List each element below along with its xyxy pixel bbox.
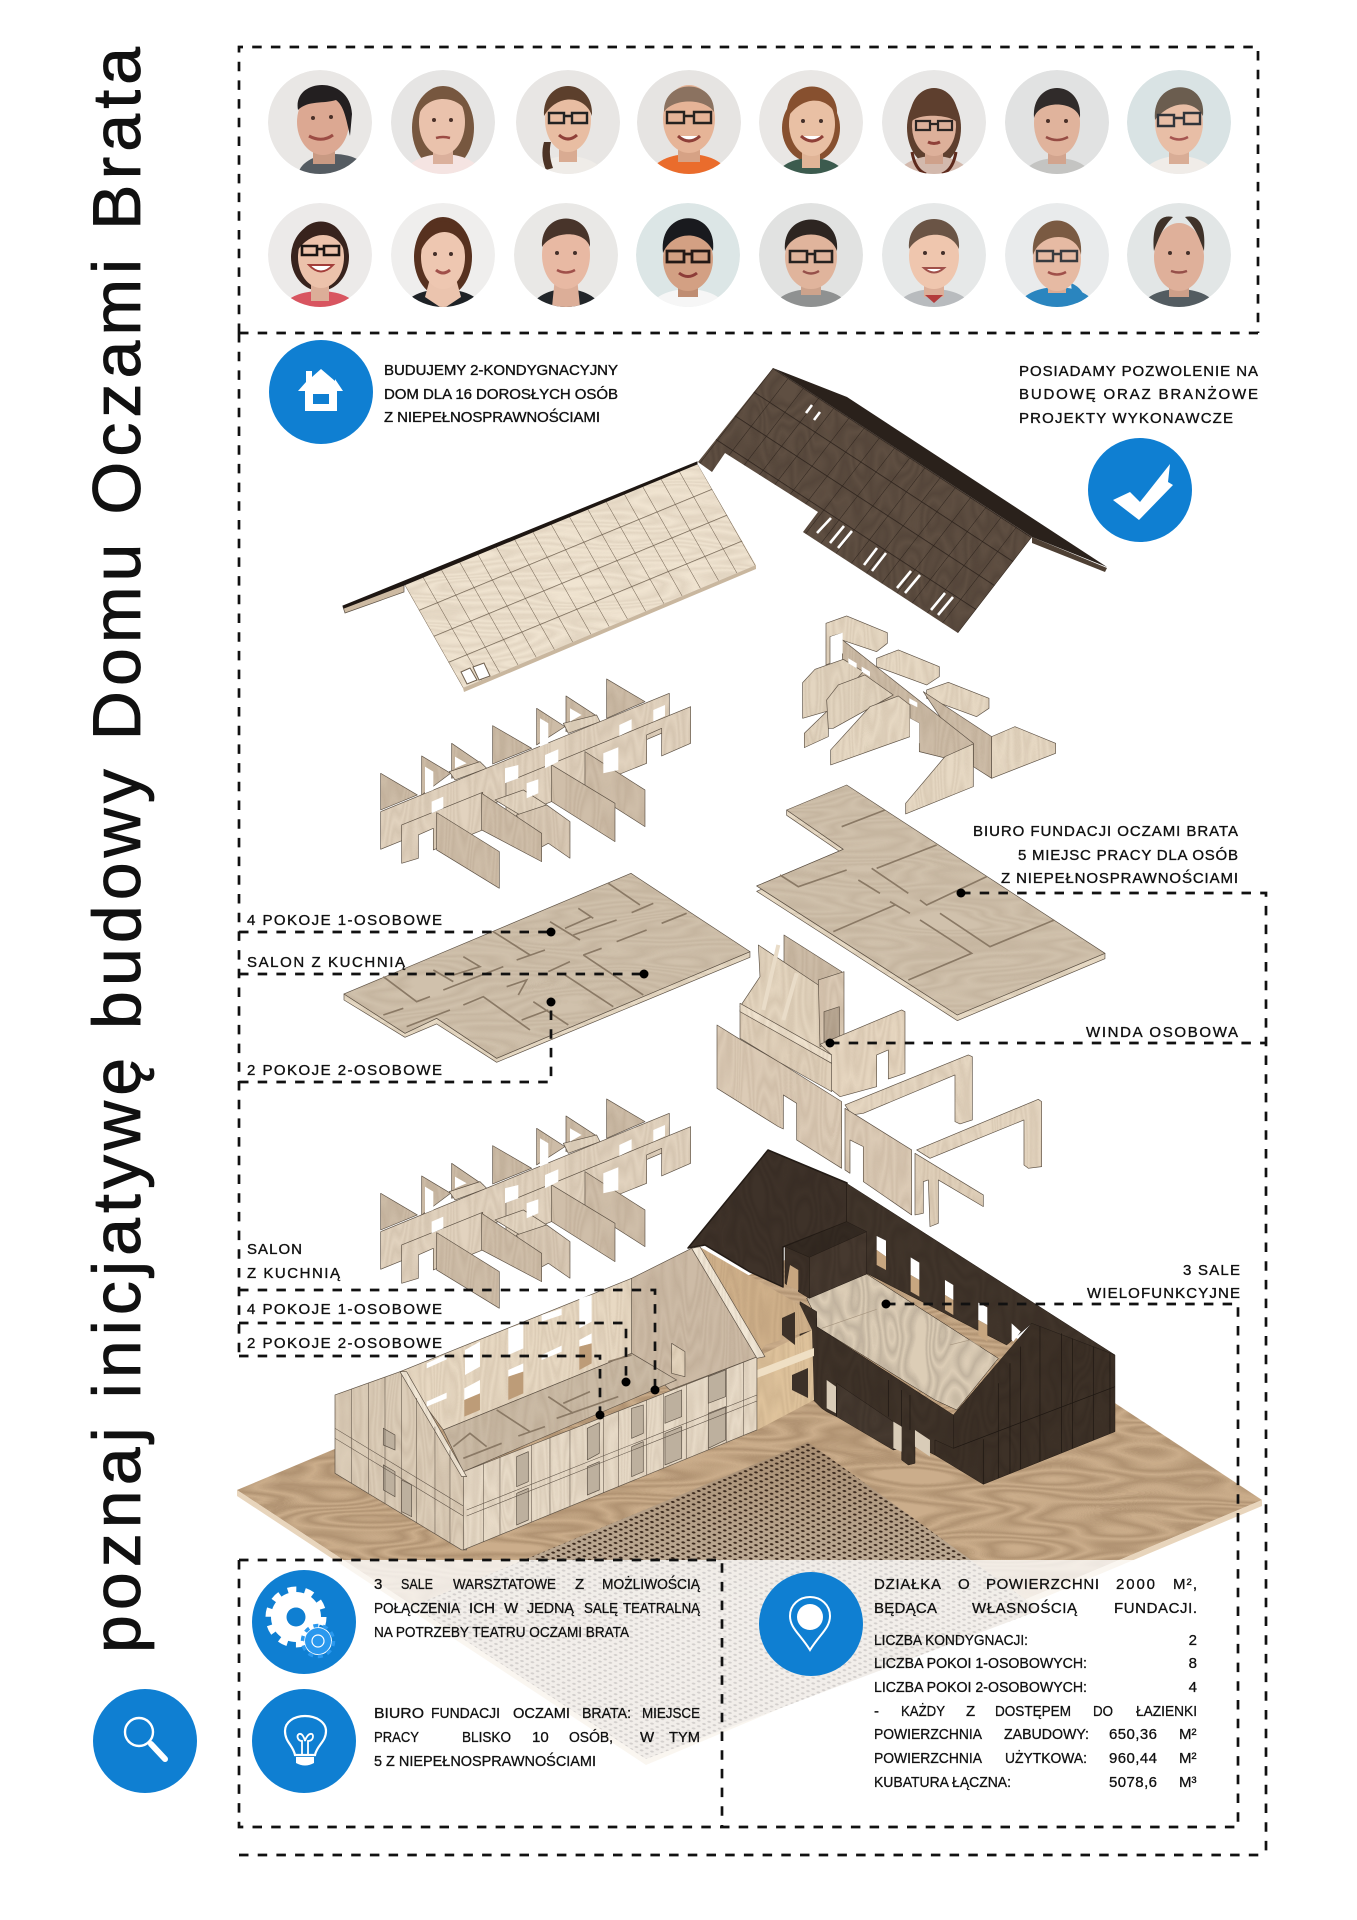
labels: ground floor rooms: 2 POKOJE 2-OSOBOWE (247, 1335, 442, 1352)
table: building data: Z (966, 1703, 975, 1720)
text: biuro fundacji miejsca pracy: 10 (532, 1729, 549, 1746)
text: biuro fundacji miejsca pracy: OSÓB, (569, 1729, 613, 1746)
labels: biuro fundacji: BIURO FUNDACJI OCZAMI BRATA (973, 823, 1238, 840)
table: building data: 4 (1189, 1679, 1197, 1696)
callout: salon z kuchnia (floor) (239, 970, 648, 978)
labels: floor rooms: SALON Z KUCHNIĄ (247, 954, 406, 971)
text: budujemy: BUDUJEMY 2-KONDYGNACYJNY (384, 362, 618, 379)
table: building data: 5078,6 (1109, 1774, 1157, 1791)
portrait 9 (268, 203, 372, 307)
table: building data: KAŻDY (901, 1702, 945, 1720)
table: building data: 2 (1189, 1632, 1197, 1649)
ground plate with courtyard (237, 1231, 1262, 1765)
portrait 15 (1005, 203, 1109, 307)
labels: biuro fundacji (973, 823, 1238, 887)
text: biuro fundacji miejsca pracy: TYM (669, 1729, 700, 1746)
text: sale warsztatowe: W (504, 1600, 519, 1617)
text: biuro fundacji miejsca pracy: 5 Z NIEPEŁNOSPRAWNOŚCIAMI (374, 1752, 596, 1770)
dark roof panel (698, 368, 1107, 633)
callout: 2 pokoje 2-osobowe (ground) (239, 1356, 604, 1420)
callout: salon z kuchnia (ground) (239, 1290, 660, 1394)
labels: biuro fundacji: Z NIEPEŁNOSPRAWNOŚCIAMI (1001, 869, 1238, 887)
portrait 1 (268, 70, 372, 174)
text: dzialka: BĘDĄCA (874, 1600, 937, 1617)
labels: ground floor rooms: SALON (247, 1241, 302, 1258)
callout: frame top and dividers (239, 47, 1258, 1356)
table: building data: M² (1179, 1726, 1196, 1743)
text: sale warsztatowe: SALĘ (584, 1600, 618, 1617)
fade overlay over lower plate (239, 1560, 1266, 1775)
upper floor plate right (757, 785, 1105, 1021)
icon: house (269, 340, 373, 444)
portrait 4 (637, 70, 741, 174)
portrait 3 (516, 70, 620, 174)
text: budujemy: Z NIEPEŁNOSPRAWNOŚCIAMI (384, 408, 600, 426)
callout: 4 pokoje 1-osobowe (floor) (239, 928, 556, 936)
table: building data: DO (1093, 1703, 1113, 1720)
text: dzialka (874, 1576, 1197, 1617)
text: sale warsztatowe: NA POTRZEBY TEATRU OCZAMI BRATA (374, 1624, 629, 1641)
labels: ground floor rooms (247, 1241, 442, 1352)
portrait 16 (1127, 203, 1231, 307)
text: sale warsztatowe (374, 1575, 701, 1641)
callout: 4 pokoje 1-osobowe (ground) (239, 1323, 630, 1386)
table: building data: 8 (1189, 1655, 1197, 1672)
lower floor partition walls (381, 1099, 691, 1308)
text: biuro fundacji miejsca pracy: PRACY (374, 1729, 419, 1746)
table: building data: ZABUDOWY: (1004, 1726, 1089, 1743)
text: sale warsztatowe: MOŻLIWOŚCIĄ (602, 1575, 701, 1593)
upper floor partition walls right (803, 616, 1056, 814)
text: biuro fundacji miejsca pracy: OCZAMI (513, 1705, 570, 1722)
text: dzialka: POWIERZCHNI (986, 1576, 1099, 1593)
text: pozwolenie: POSIADAMY POZWOLENIE NA (1019, 363, 1258, 380)
light roof panel (343, 462, 756, 692)
portrait 8 (1127, 70, 1231, 174)
text: budujemy (384, 362, 618, 426)
panel: portraits of residents (268, 70, 1231, 337)
text: pozwolenie (1019, 363, 1258, 427)
portrait 6 (882, 70, 986, 174)
table: building data: LICZBA KONDYGNACJI: (874, 1632, 1028, 1649)
portrait 7 (1005, 70, 1109, 174)
light residential building (335, 1247, 765, 1550)
icon: gears (252, 1570, 356, 1674)
text: sale warsztatowe: SALE (401, 1576, 433, 1593)
labels: 3 sale wielofunkcyjne: 3 SALE (1183, 1262, 1240, 1279)
labels: floor rooms (247, 912, 442, 1079)
text: biuro fundacji miejsca pracy: BRATA: (582, 1705, 631, 1722)
label: winda osobowa: WINDA OSOBOWA (1086, 1024, 1238, 1041)
portrait 12 (636, 203, 740, 307)
callout: 2 pokoje 2-osobowe (floor) (239, 998, 556, 1082)
table: building data: 650,36 (1109, 1726, 1157, 1743)
text: dzialka: WŁASNOŚCIĄ (972, 1599, 1078, 1617)
table: building data: M² (1179, 1750, 1196, 1767)
table: building data: - (874, 1703, 879, 1720)
labels: biuro fundacji: 5 MIEJSC PRACY DLA OSÓB (1018, 847, 1238, 864)
table: building data: POWIERZCHNIA (874, 1726, 982, 1743)
labels: floor rooms: 4 POKOJE 1-OSOBOWE (247, 912, 442, 929)
table: building data: 960,44 (1109, 1750, 1157, 1767)
text: biuro fundacji miejsca pracy: BLISKO (462, 1729, 511, 1746)
labels: ground floor rooms: Z KUCHNIĄ (247, 1265, 341, 1282)
table: building data: UŻYTKOWA: (1005, 1749, 1087, 1767)
callout lines with dots (239, 47, 1266, 1855)
portrait 13 (759, 203, 863, 307)
icon: light bulb (252, 1689, 356, 1793)
table: building data: LICZBA POKOI 2-OSOBOWYCH: (874, 1679, 1087, 1696)
text: biuro fundacji miejsca pracy: FUNDACJI (431, 1705, 500, 1722)
text: sale warsztatowe: Z (575, 1576, 584, 1593)
table: building data: ŁAZIENKI (1136, 1703, 1197, 1720)
title: poznaj inicjatywę budowy Domu Oczami Brata (79, 47, 155, 1653)
text: biuro fundacji miejsca pracy (374, 1705, 700, 1770)
portrait 11 (514, 203, 618, 307)
icon: magnifier (93, 1689, 197, 1793)
upper floor plate left (344, 873, 750, 1062)
callout: winda osobowa (826, 1038, 1266, 1048)
text: dzialka: 2000 (1116, 1576, 1155, 1593)
callout: biuro fundacji (956, 888, 1266, 1855)
table: building data: M³ (1179, 1774, 1196, 1791)
portrait 14 (882, 203, 986, 307)
labels: floor rooms: 2 POKOJE 2-OSOBOWE (247, 1062, 442, 1079)
dark workshop building (688, 1150, 1115, 1484)
text: sale warsztatowe: WARSZTATOWE (453, 1576, 556, 1593)
text: sale warsztatowe: 3 (374, 1576, 382, 1593)
table: building data (874, 1632, 1197, 1791)
labels: 3 sale wielofunkcyjne: WIELOFUNKCYJNE (1087, 1285, 1240, 1302)
elevator and connector timber frame (717, 935, 1042, 1227)
icon: check mark (1088, 438, 1192, 542)
text: sale warsztatowe: POŁĄCZENIA (374, 1600, 460, 1617)
table: building data: LICZBA POKOI 1-OSOBOWYCH: (874, 1655, 1087, 1672)
bottom frames (239, 1560, 1266, 1855)
table: building data: POWIERZCHNIA (874, 1750, 982, 1767)
text: biuro fundacji miejsca pracy: BIURO (374, 1705, 424, 1722)
text: dzialka: M², (1173, 1576, 1197, 1593)
text: dzialka: DZIAŁKA (874, 1576, 941, 1593)
labels: 3 sale wielofunkcyjne (1087, 1262, 1240, 1302)
labels: ground floor rooms: 4 POKOJE 1-OSOBOWE (247, 1301, 442, 1318)
timber connector between wings (700, 1247, 814, 1430)
text: sale warsztatowe: JEDNĄ (527, 1600, 575, 1617)
icon: map pin (759, 1572, 863, 1676)
text: dzialka: FUNDACJI. (1114, 1600, 1197, 1617)
text: pozwolenie: BUDOWĘ ORAZ BRANŻOWE (1019, 385, 1258, 403)
text: biuro fundacji miejsca pracy: W (640, 1729, 655, 1746)
upper floor partition walls left (381, 679, 691, 888)
callout: 3 sale wielofunkcyjne (882, 1300, 1238, 1827)
text: budujemy: DOM DLA 16 DOROSŁYCH OSÓB (384, 386, 618, 403)
text: sale warsztatowe: ICH (469, 1600, 495, 1617)
text: pozwolenie: PROJEKTY WYKONAWCZE (1019, 410, 1233, 427)
text: dzialka: O (958, 1576, 970, 1593)
portrait 2 (391, 70, 495, 174)
text: biuro fundacji miejsca pracy: MIEJSCE (642, 1705, 700, 1722)
portrait 10 (391, 203, 495, 307)
table: building data: DOSTĘPEM (995, 1703, 1071, 1720)
table: building data: KUBATURA ŁĄCZNA: (874, 1774, 1011, 1791)
text: sale warsztatowe: TEATRALNĄ (623, 1600, 701, 1617)
portrait 5 (759, 70, 863, 174)
